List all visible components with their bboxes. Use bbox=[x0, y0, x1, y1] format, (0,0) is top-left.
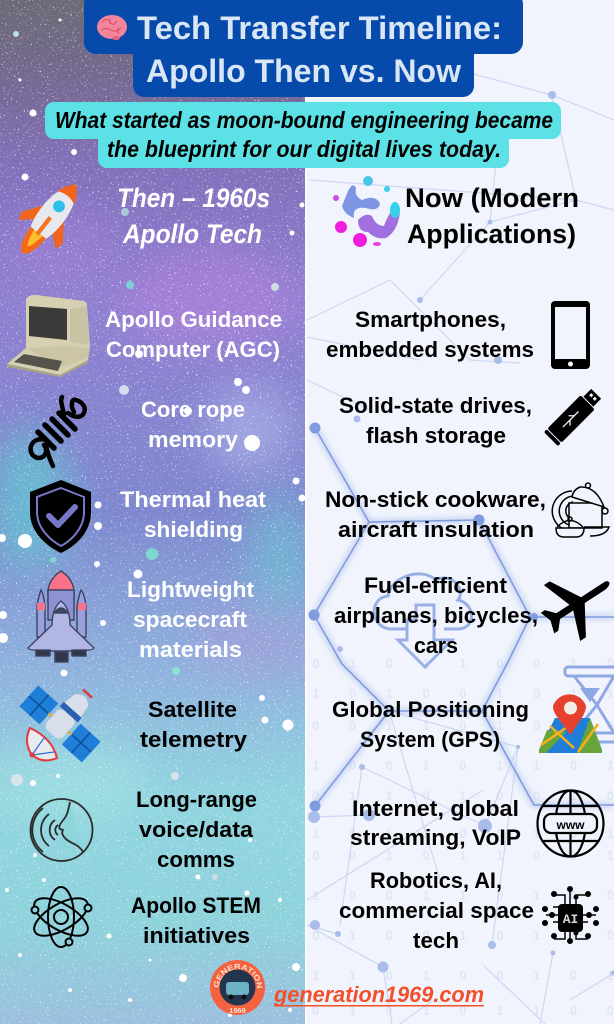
heading: then bbox=[117, 183, 270, 249]
text: solid-state drives: flash storage bbox=[366, 423, 506, 448]
icon: atom bbox=[29, 887, 93, 947]
title text: Apollo Then vs. Now bbox=[146, 53, 461, 89]
text: core rope memory: Core rope bbox=[141, 397, 245, 422]
title text bbox=[137, 10, 502, 89]
heading: then: Then – 1960s bbox=[117, 183, 270, 213]
text: voice comms bbox=[136, 787, 257, 872]
text: non-stick cookware: aircraft insulation bbox=[338, 517, 534, 542]
icon: AI chip bbox=[542, 886, 599, 944]
text: lightweight spacecraft materials: spacecraft bbox=[133, 607, 248, 632]
panel: then background bbox=[0, 0, 330, 1024]
subtitle banner bbox=[45, 102, 561, 168]
heading: now bbox=[405, 183, 579, 249]
text: robotics: Robotics, AI, bbox=[370, 868, 502, 893]
text: satellite telemetry: Satellite bbox=[148, 697, 237, 722]
text: core rope memory: memory bbox=[148, 427, 239, 452]
text: lightweight spacecraft materials bbox=[127, 577, 255, 662]
heading: now: Now (Modern bbox=[405, 183, 579, 213]
icon: retro computer bbox=[7, 295, 90, 377]
text: robotics: tech bbox=[413, 928, 459, 953]
text: internet: Internet, global bbox=[352, 796, 519, 821]
text: thermal heat shielding bbox=[120, 487, 267, 542]
title banner bbox=[84, 0, 523, 97]
text: solid-state drives: Solid-state drives, bbox=[339, 393, 532, 418]
text: fuel-efficient: cars bbox=[414, 633, 458, 658]
icon: colorful blob bbox=[333, 176, 400, 247]
text: core rope memory bbox=[141, 397, 245, 452]
icon: www globe: www bbox=[555, 818, 585, 832]
icon: cloud with download arrow bbox=[374, 574, 472, 667]
text: fuel-efficient: airplanes, bicycles, bbox=[334, 603, 538, 628]
icon: rope knot bbox=[31, 397, 85, 466]
text: non-stick cookware bbox=[325, 487, 546, 542]
icon: AI chip: AI bbox=[563, 912, 578, 927]
text: smartphones bbox=[326, 307, 534, 362]
text: smartphones: embedded systems bbox=[326, 337, 534, 362]
icon: satellite bbox=[19, 665, 119, 763]
icon: www globe bbox=[538, 790, 604, 857]
icon: airplane bbox=[519, 544, 614, 662]
heading: now: Applications) bbox=[407, 219, 576, 249]
text: apollo guidance computer: Apollo Guidance bbox=[105, 307, 282, 332]
text: internet: streaming, VoIP bbox=[350, 825, 521, 850]
text: voice comms: voice/data bbox=[139, 817, 254, 842]
logo: generation 1969: 1969 bbox=[229, 1006, 246, 1015]
logo: generation 1969: GENERATION bbox=[214, 964, 262, 988]
icon: map pin bbox=[539, 694, 602, 753]
text: fuel-efficient: Fuel-efficient bbox=[364, 573, 508, 598]
heading: then: Apollo Tech bbox=[122, 219, 262, 249]
icon: cookware bbox=[552, 483, 609, 537]
text: apollo stem: Apollo STEM bbox=[131, 893, 261, 918]
text: fuel-efficient bbox=[334, 573, 538, 658]
text: voice comms: comms bbox=[157, 847, 235, 872]
icon: usb drive bbox=[544, 387, 603, 446]
title text: Tech Transfer Timeline: bbox=[137, 10, 502, 46]
text: robotics bbox=[339, 868, 534, 953]
text: satellite telemetry bbox=[140, 697, 248, 752]
text: internet bbox=[350, 796, 521, 850]
subtitle banner: What started as moon-bound engineering became bbox=[55, 107, 553, 133]
text: apollo stem bbox=[131, 893, 261, 948]
text: non-stick cookware: Non-stick cookware, bbox=[325, 487, 546, 512]
icon: space shuttle bbox=[28, 571, 94, 662]
icon: phone bbox=[551, 301, 590, 369]
icon: voice profile bbox=[30, 799, 92, 861]
text: voice comms: Long-range bbox=[136, 787, 257, 812]
text: solid-state drives bbox=[339, 393, 532, 448]
text: lightweight spacecraft materials: materials bbox=[139, 637, 242, 662]
text: satellite telemetry: telemetry bbox=[140, 727, 248, 752]
website link: generation1969.com bbox=[273, 982, 484, 1007]
icon: faint hourglass bbox=[565, 667, 614, 742]
subtitle banner: the blueprint for our digital lives today. bbox=[107, 136, 501, 162]
text: apollo stem: initiatives bbox=[143, 923, 250, 948]
text: lightweight spacecraft materials: Lightweight bbox=[127, 577, 255, 602]
text: gps bbox=[332, 697, 529, 752]
text: gps: System (GPS) bbox=[360, 727, 500, 752]
text: gps: Global Positioning bbox=[332, 697, 529, 722]
logo: generation 1969 bbox=[210, 960, 265, 1015]
icon: rocket bbox=[2, 168, 97, 269]
text: apollo guidance computer bbox=[105, 307, 282, 362]
text: robotics: commercial space bbox=[339, 898, 534, 923]
text: thermal heat shielding: shielding bbox=[144, 517, 243, 542]
text: thermal heat shielding: Thermal heat bbox=[120, 487, 267, 512]
icon: shield bbox=[30, 480, 91, 553]
icon: brain bbox=[97, 15, 127, 40]
text: apollo guidance computer: Computer (AGC) bbox=[106, 337, 280, 362]
panel: now background bbox=[305, 0, 614, 1024]
text: smartphones: Smartphones, bbox=[355, 307, 506, 332]
